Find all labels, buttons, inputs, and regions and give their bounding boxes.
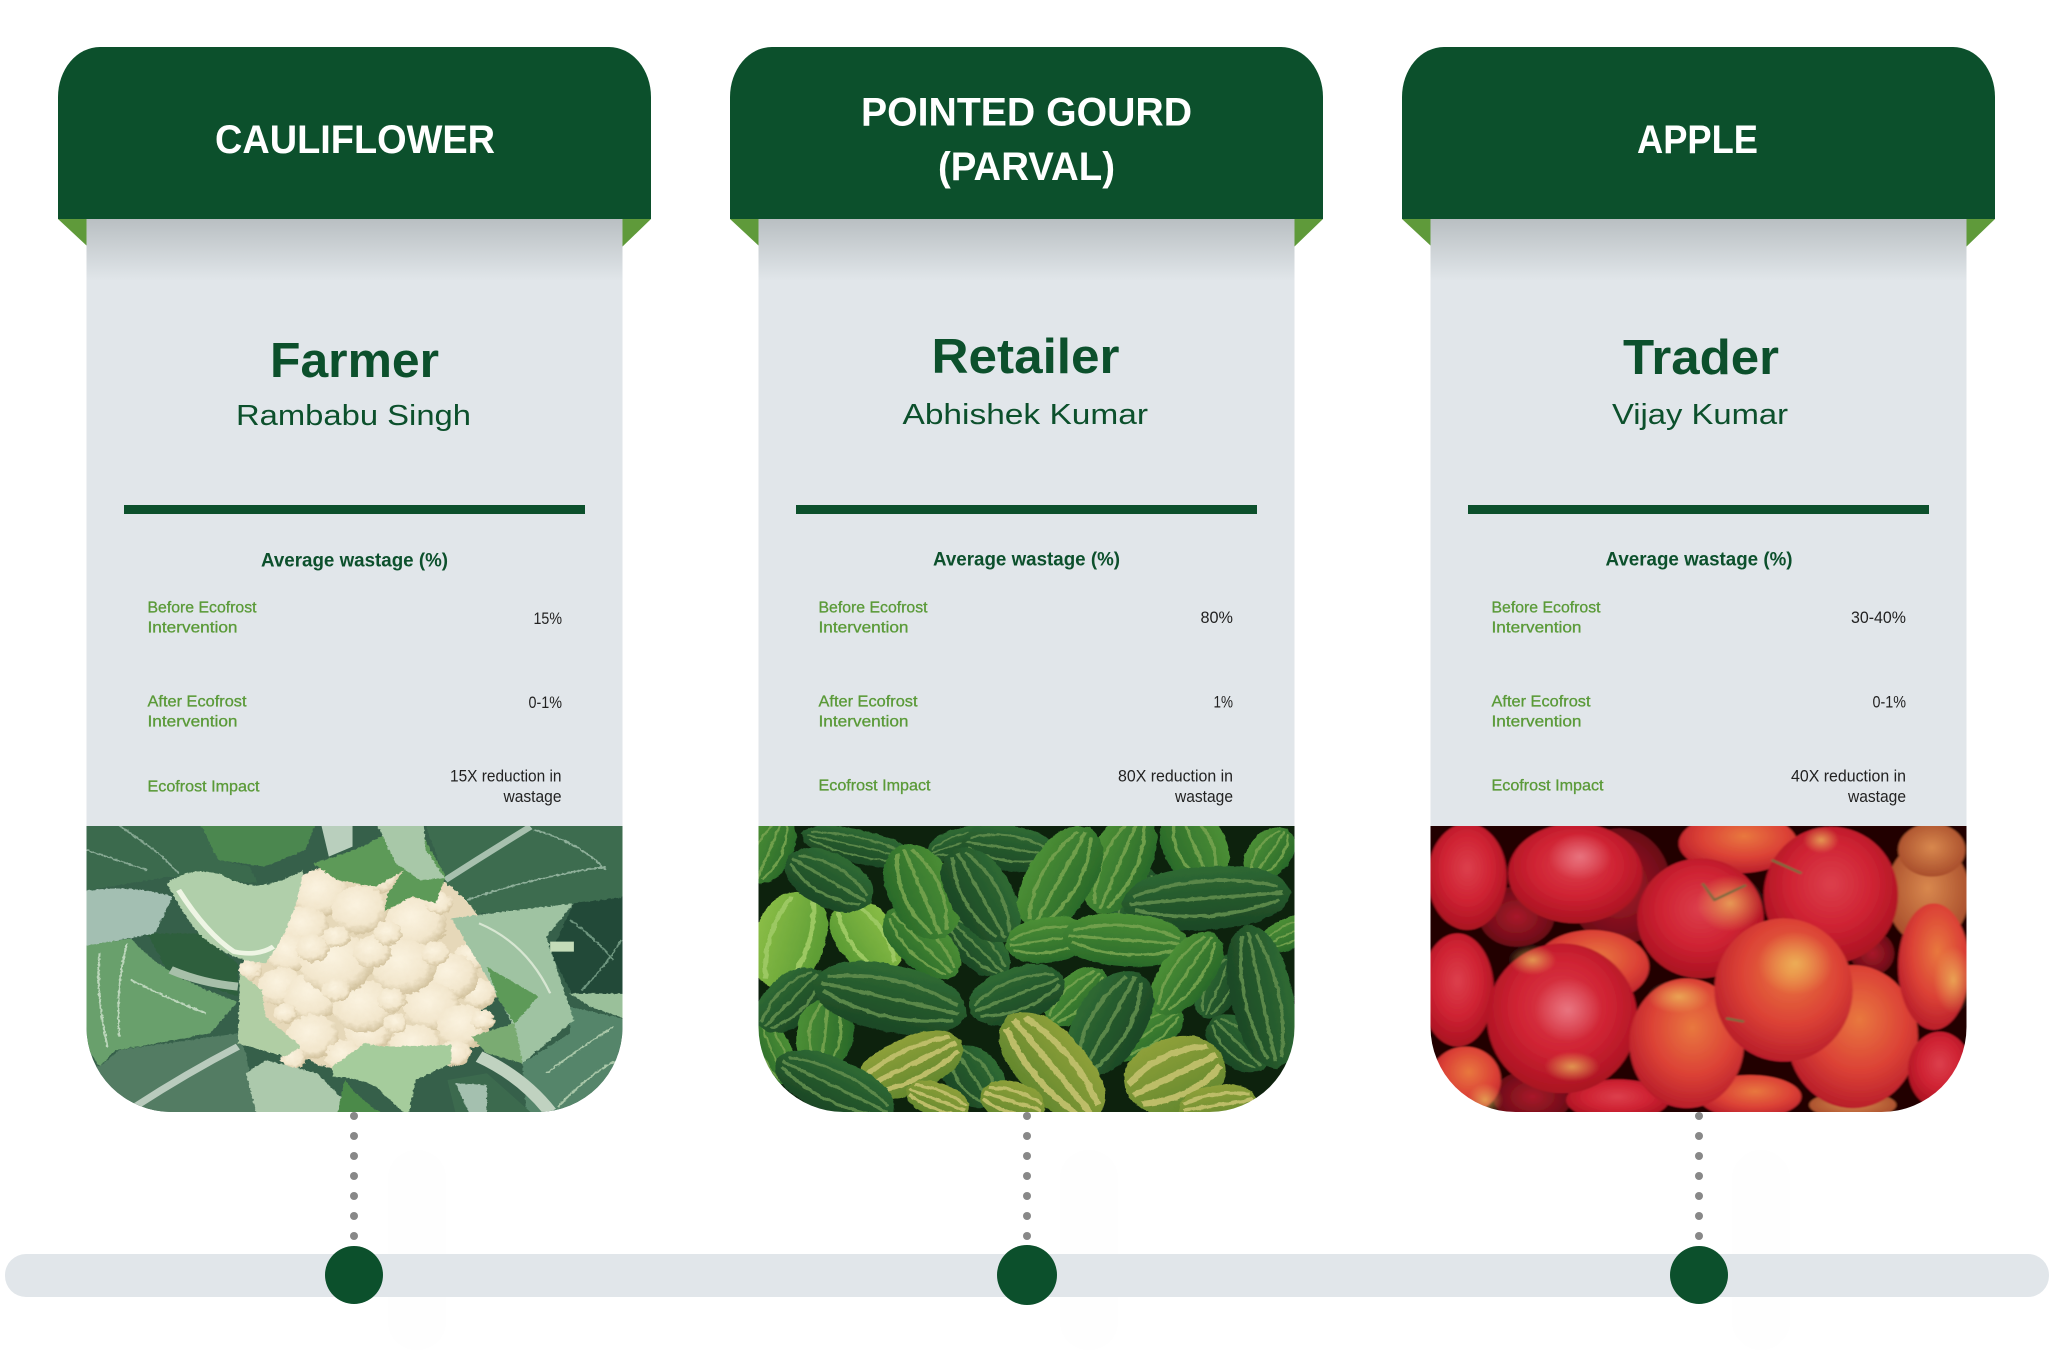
row: before: 80% bbox=[1200, 609, 1233, 627]
connector dots bbox=[1695, 1112, 1703, 1240]
row: impact: wastage bbox=[1174, 788, 1233, 806]
connector dots bbox=[1023, 1112, 1031, 1240]
row: impact: 40X reduction in bbox=[1791, 768, 1906, 786]
row: before: Intervention bbox=[148, 620, 238, 636]
row: before: 15% bbox=[534, 610, 562, 628]
heading: pointed gourd: (PARVAL) bbox=[938, 145, 1115, 189]
row: after: 0-1% bbox=[1872, 694, 1906, 712]
row: after bbox=[148, 694, 562, 730]
timeline marker bbox=[997, 1245, 1057, 1305]
timeline bar bbox=[5, 1254, 2049, 1297]
row: after bbox=[1492, 694, 1906, 730]
table heading: Average wastage (%) bbox=[933, 550, 1120, 570]
timeline marker bbox=[1670, 1246, 1728, 1304]
row: impact: 80X reduction in bbox=[1118, 768, 1233, 786]
row: impact bbox=[148, 768, 562, 806]
row: impact: Ecofrost Impact bbox=[818, 778, 931, 794]
photo: apples bbox=[1430, 826, 1966, 1112]
heading: cauliflower: CAULIFLOWER bbox=[215, 118, 495, 162]
row: impact: Ecofrost Impact bbox=[148, 778, 260, 796]
card: apple trader bbox=[1402, 47, 1995, 1304]
role: farmer: Farmer bbox=[270, 334, 439, 388]
row: impact: 15X reduction in bbox=[450, 768, 562, 786]
heading: pointed gourd bbox=[861, 90, 1192, 189]
row: after: Intervention bbox=[1492, 714, 1582, 730]
role: retailer: Retailer bbox=[932, 330, 1120, 384]
row: before: Before Ecofrost bbox=[148, 600, 257, 616]
row: impact: Ecofrost Impact bbox=[1492, 778, 1604, 794]
row: after: Intervention bbox=[148, 714, 238, 730]
row: before: 30-40% bbox=[1851, 609, 1906, 627]
heading: apple: APPLE bbox=[1637, 118, 1758, 162]
row: before bbox=[1492, 600, 1906, 636]
panel body bbox=[86, 219, 622, 829]
header banner bbox=[730, 47, 1323, 219]
name: Abhishek Kumar bbox=[902, 399, 1148, 431]
row: before: Before Ecofrost bbox=[818, 600, 928, 616]
name: Vijay Kumar bbox=[1612, 399, 1788, 431]
heading: pointed gourd: POINTED GOURD bbox=[861, 90, 1192, 134]
header banner bbox=[58, 47, 651, 219]
row: impact: wastage bbox=[1847, 788, 1906, 806]
table heading: Average wastage (%) bbox=[261, 550, 448, 572]
table heading: Average wastage (%) bbox=[1606, 550, 1792, 570]
row: before: Intervention bbox=[818, 620, 908, 636]
row: impact: wastage bbox=[503, 788, 562, 806]
row: after: Intervention bbox=[818, 714, 908, 730]
photo: pointed gourd bbox=[758, 826, 1294, 1112]
row: after bbox=[818, 694, 1233, 730]
card: pointed gourd retailer bbox=[730, 47, 1326, 1305]
header banner bbox=[1402, 47, 1995, 219]
row: after: After Ecofrost bbox=[818, 694, 918, 710]
panel body bbox=[1430, 219, 1966, 829]
folded ribbon corners bbox=[730, 219, 1323, 247]
row: after: 1% bbox=[1214, 694, 1233, 712]
row: before bbox=[818, 600, 1233, 636]
role: trader: Trader bbox=[1623, 331, 1779, 385]
name: Rambabu Singh bbox=[236, 400, 471, 432]
row: after: After Ecofrost bbox=[1492, 694, 1591, 710]
timeline marker bbox=[325, 1246, 383, 1304]
folded ribbon corners bbox=[58, 219, 651, 247]
connector dots bbox=[350, 1112, 358, 1240]
folded ribbon corners bbox=[1402, 219, 1995, 247]
row: impact bbox=[818, 768, 1233, 806]
row: before bbox=[148, 600, 562, 636]
row: after: After Ecofrost bbox=[148, 694, 247, 710]
row: before: Intervention bbox=[1492, 620, 1582, 636]
card: cauliflower farmer bbox=[58, 47, 651, 1304]
row: before: Before Ecofrost bbox=[1492, 600, 1601, 616]
panel body bbox=[758, 219, 1294, 829]
row: after: 0-1% bbox=[528, 694, 562, 712]
photo: cauliflower bbox=[80, 820, 629, 1117]
row: impact bbox=[1492, 768, 1906, 806]
